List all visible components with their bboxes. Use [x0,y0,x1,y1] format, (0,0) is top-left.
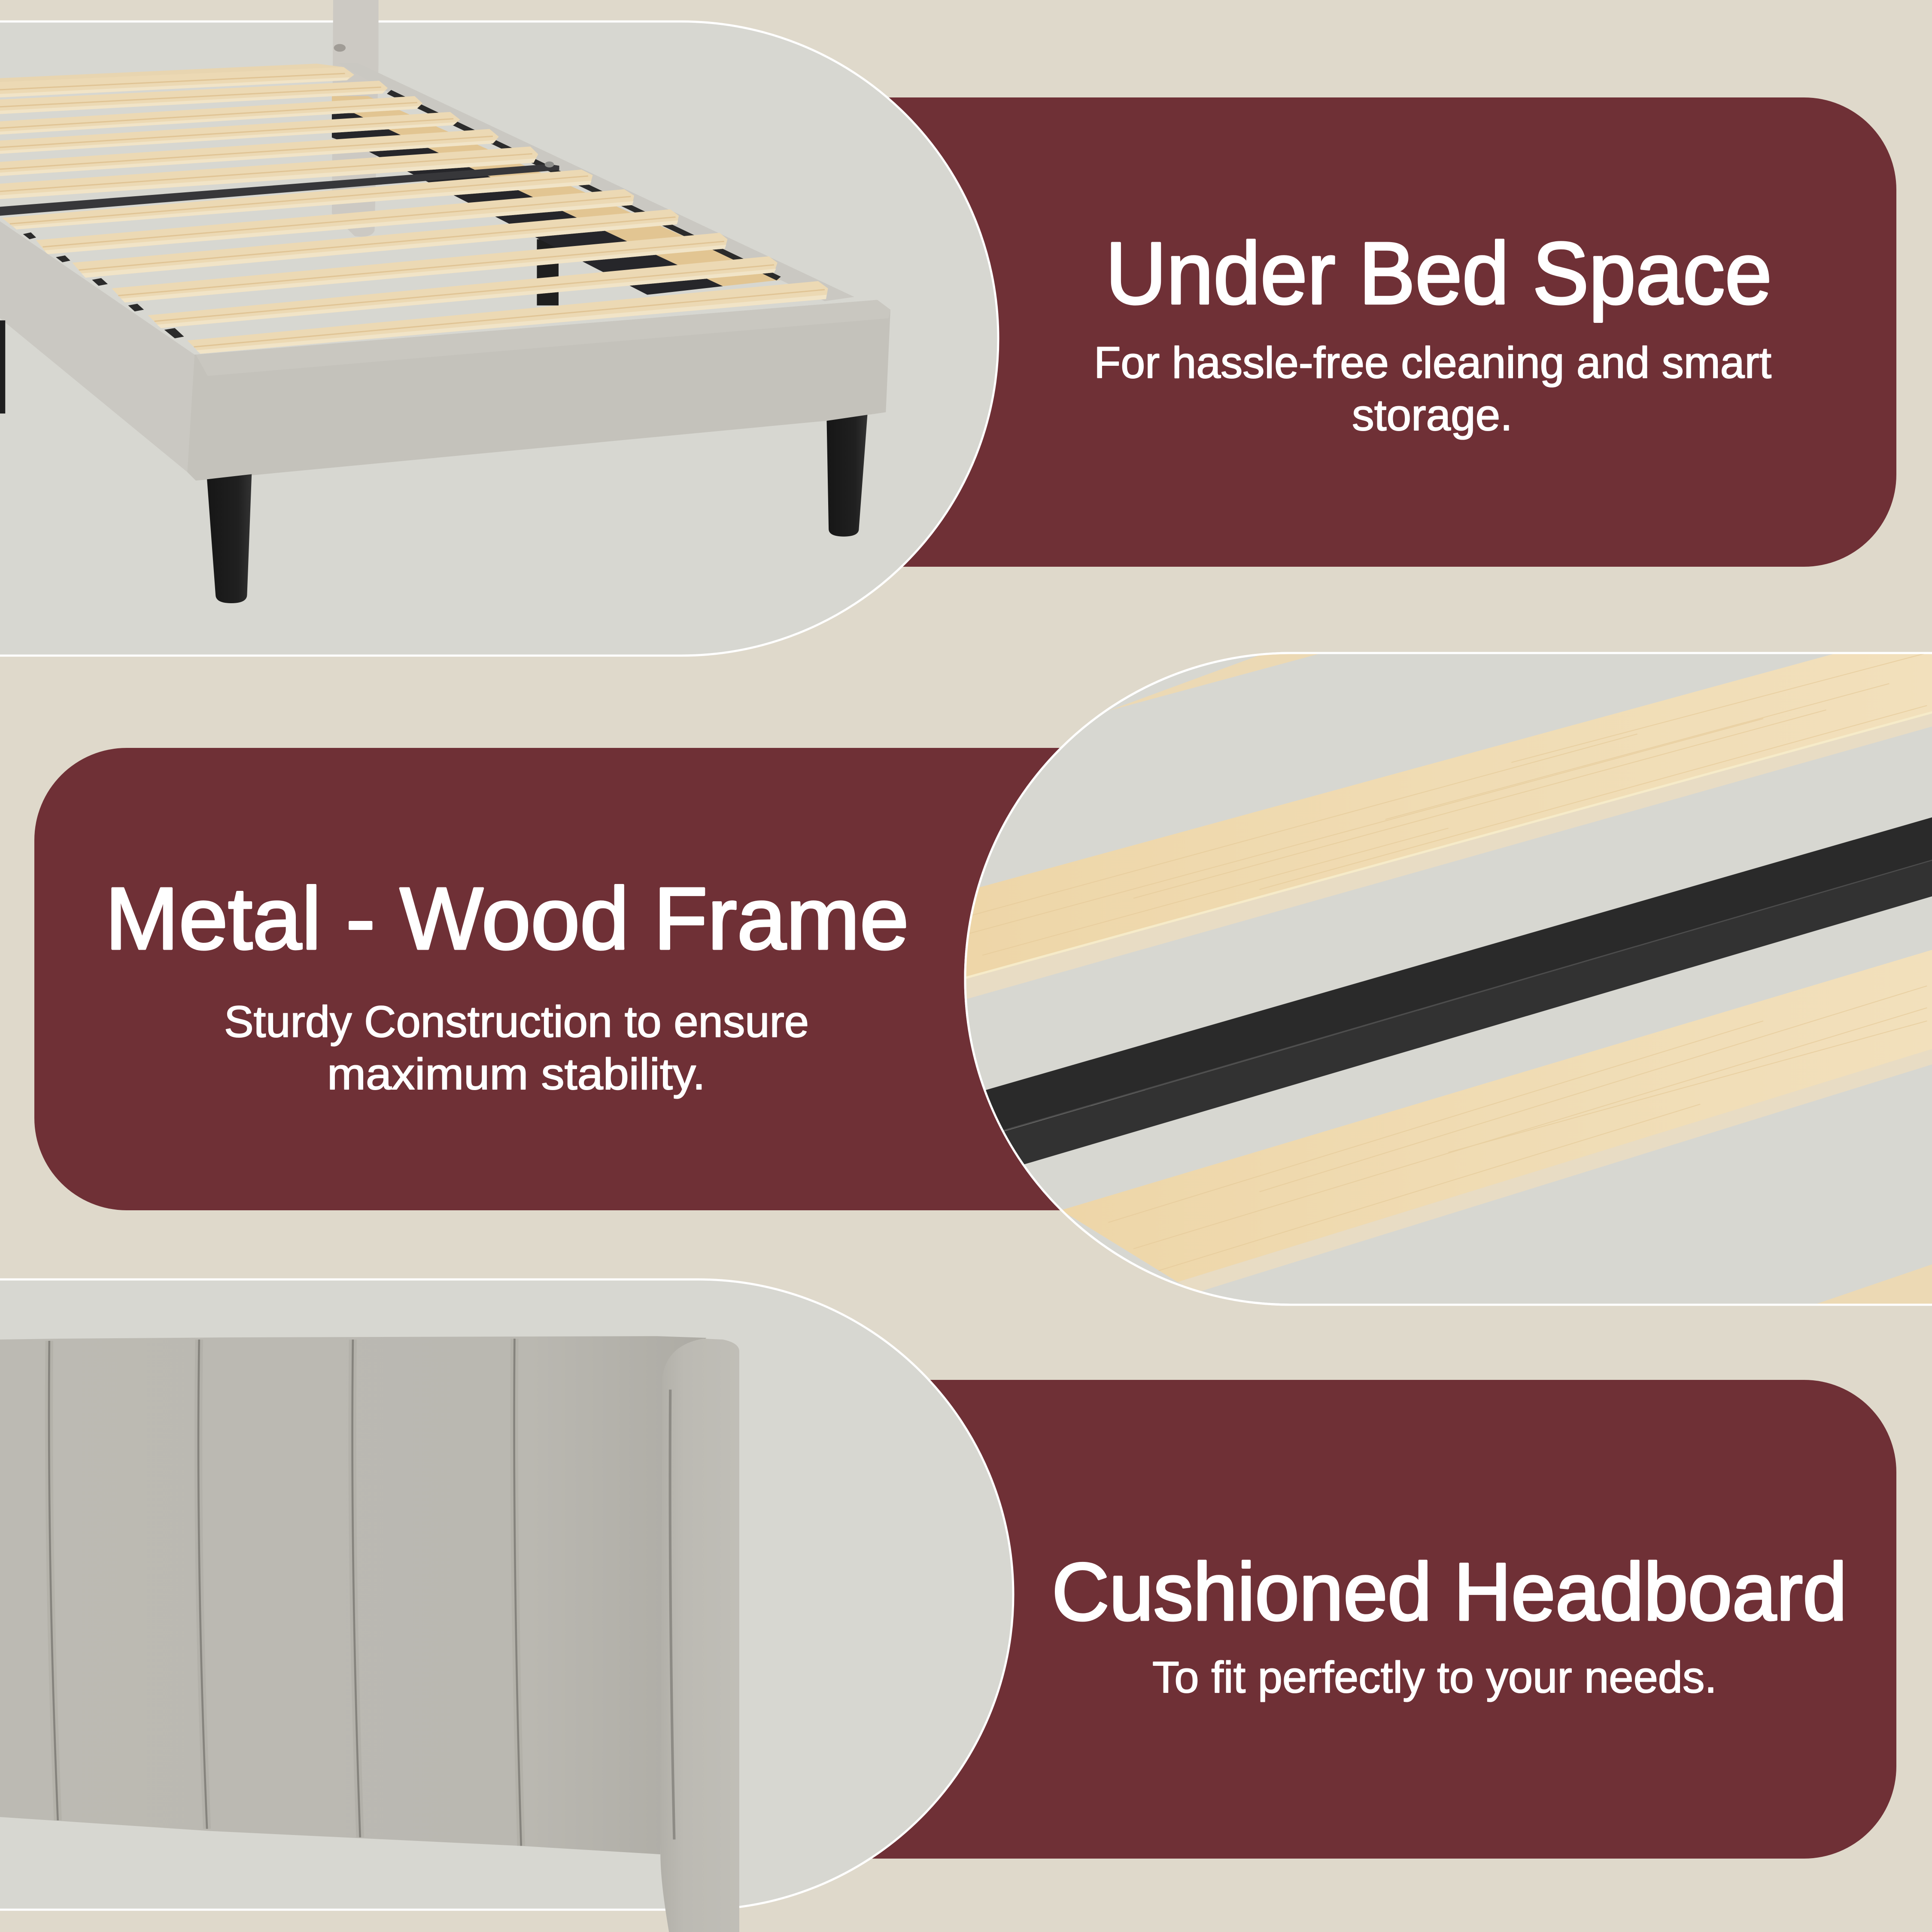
panel outline [965,653,1932,1305]
headboard face [0,1336,706,1854]
text block: under bed space description: For hassle-free cleaning and smart [1094,338,1771,387]
text block: metal wood frame description: Sturdy Construction to ensure [224,997,809,1046]
card: under bed space [644,97,1896,567]
heading: under bed space: Under Bed Space [1106,224,1772,322]
upper wood slat [963,651,1932,979]
panel: bed frame photo [0,0,998,656]
card background [644,97,1896,567]
rear slats [0,64,538,199]
card background [34,748,1288,1210]
panel: slats photo [963,651,1932,1310]
metal bar ridge [1002,854,1932,1131]
channel seam shadows [49,1339,521,1846]
card background [644,1380,1896,1859]
metal centre bar [0,164,559,216]
back leg [537,239,559,305]
side support metal [332,113,723,295]
text: cushioned headboard description: To fit perfectly to your needs. [1152,1653,1717,1702]
headboard wing [660,1339,739,1932]
heading: metal wood frame: Metal - Wood Frame [105,869,909,968]
front slats [2,170,828,354]
illustration: wood slats and metal bar [963,651,1932,1310]
card: cushioned headboard [644,1380,1896,1859]
headboard post [332,0,379,237]
panel background [0,1279,1013,1910]
illustration: bed frame [0,0,890,603]
left side rail [0,221,194,472]
lower wood slat [1061,944,1932,1282]
top corner slat [1108,653,1322,711]
text block: metal wood frame description: maximum stability. [327,1049,705,1099]
panel background [965,653,1932,1305]
text block: metal wood frame description [224,997,809,1099]
metal bar top face [982,811,1932,1131]
bolt [545,161,554,167]
metal bar lower face [1002,855,1932,1165]
illustration: headboard [0,1336,739,1932]
text block: under bed space description: storage. [1352,390,1513,440]
front right leg [826,415,867,537]
panel: headboard photo [0,1279,1013,1932]
left rear leg [0,320,5,413]
side support wood [332,96,782,286]
heading: cushioned headboard: Cushioned Headboard [1052,1546,1847,1637]
front left leg [207,474,252,603]
left slat rests [23,232,184,338]
panel background [0,21,998,656]
front rail [187,300,890,480]
card: metal wood frame [34,748,1288,1210]
bottom corner slat [1814,1258,1932,1310]
right rail [338,63,854,301]
text block: under bed space description [1094,338,1771,440]
channel seams [49,1339,521,1846]
